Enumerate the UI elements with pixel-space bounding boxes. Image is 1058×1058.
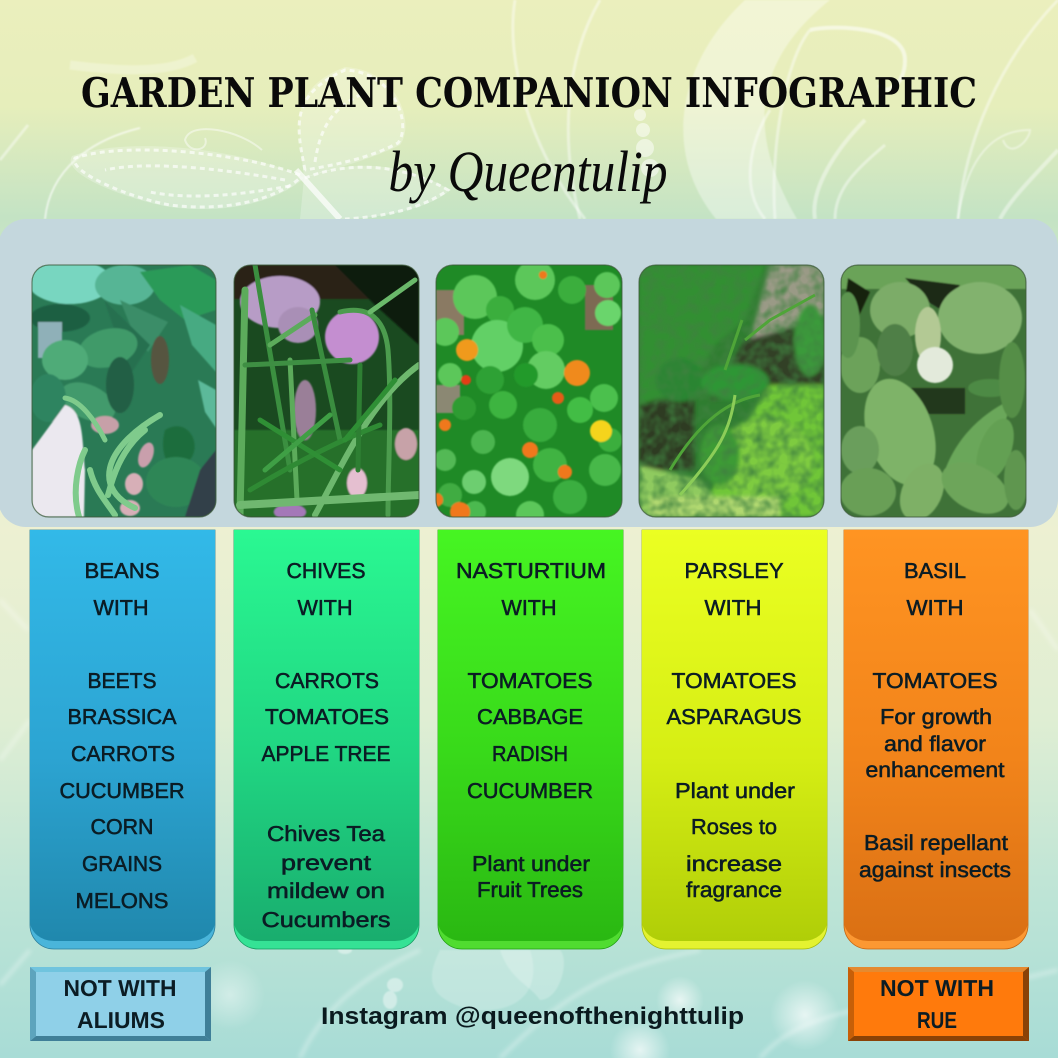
callout: not with rue <box>848 967 1029 1041</box>
photo: beans <box>28 260 216 520</box>
beans text: CORN <box>90 815 154 839</box>
callout: not with aliums: ALIUMS <box>77 1007 165 1033</box>
basil text: enhancement <box>866 758 1005 782</box>
panel: beans card <box>30 530 215 949</box>
butterfly watermark <box>71 0 830 219</box>
basil text: For growth <box>880 705 992 729</box>
beans text: GRAINS <box>82 852 162 876</box>
photo: parsley <box>639 265 826 517</box>
chives text: WITH <box>298 596 352 620</box>
panel: photo strip <box>0 219 1058 529</box>
nasturtium text <box>456 559 606 902</box>
chives text: Cucumbers <box>262 908 390 932</box>
chives text <box>262 559 390 932</box>
nasturtium text: CABBAGE <box>477 705 583 729</box>
basil text: BASIL <box>904 559 966 583</box>
basil text: WITH <box>906 596 964 620</box>
chives text: CHIVES <box>286 559 366 583</box>
parsley text: TOMATOES <box>672 669 796 693</box>
subtitle: by Queentulip <box>388 139 668 204</box>
basil text: against insects <box>859 858 1011 882</box>
parsley text: WITH <box>704 596 762 620</box>
callout: not with aliums: NOT WITH <box>64 975 176 1001</box>
parsley text: ASPARAGUS <box>666 705 802 729</box>
chives text: mildew on <box>267 879 385 903</box>
photo: chives <box>234 265 419 520</box>
parsley text: Roses to <box>691 815 777 839</box>
beans text: CUCUMBER <box>60 779 184 803</box>
chives text: CARROTS <box>275 669 379 693</box>
panel: basil card <box>844 530 1028 949</box>
parsley text: increase <box>686 852 782 876</box>
chives text: prevent <box>281 851 371 875</box>
beans text: BEANS <box>84 559 160 583</box>
photo: basil <box>836 265 1028 528</box>
chives text: TOMATOES <box>265 705 389 729</box>
parsley text: fragrance <box>686 878 782 902</box>
chives text: Chives Tea <box>267 822 385 846</box>
chives text: APPLE TREE <box>262 742 390 766</box>
panel: parsley card <box>642 530 827 949</box>
nasturtium text: CUCUMBER <box>467 779 593 803</box>
basil text: TOMATOES <box>872 669 998 693</box>
photo: nasturtium <box>429 260 622 529</box>
nasturtium text: RADISH <box>492 742 568 766</box>
parsley text: Plant under <box>675 779 795 803</box>
basil text: Basil repellant <box>864 831 1008 855</box>
nasturtium text: NASTURTIUM <box>456 559 606 583</box>
panel: chives card <box>234 530 419 949</box>
callout: instagram handle: Instagram @queenofthenighttulip <box>321 1003 744 1030</box>
nasturtium text: Fruit Trees <box>477 878 583 902</box>
beans text: WITH <box>94 596 148 620</box>
beans text: MELONS <box>76 889 168 913</box>
panel: nasturtium card <box>438 530 623 949</box>
callout: not with aliums <box>30 967 211 1041</box>
beans text: BRASSICA <box>68 705 177 729</box>
nasturtium text: WITH <box>502 596 556 620</box>
nasturtium text: Plant under <box>472 852 590 876</box>
callout: not with rue: NOT WITH <box>880 975 994 1001</box>
beans text: BEETS <box>88 669 156 693</box>
beans text <box>60 559 184 913</box>
callout: not with rue: RUE <box>917 1007 957 1033</box>
parsley text: PARSLEY <box>684 559 784 583</box>
parsley text <box>666 559 802 902</box>
photo frames <box>32 265 1026 517</box>
basil text: and flavor <box>884 732 986 756</box>
basil text <box>859 559 1011 882</box>
nasturtium text: TOMATOES <box>468 669 592 693</box>
beans text: CARROTS <box>71 742 175 766</box>
parsley leaf texture <box>639 265 824 517</box>
